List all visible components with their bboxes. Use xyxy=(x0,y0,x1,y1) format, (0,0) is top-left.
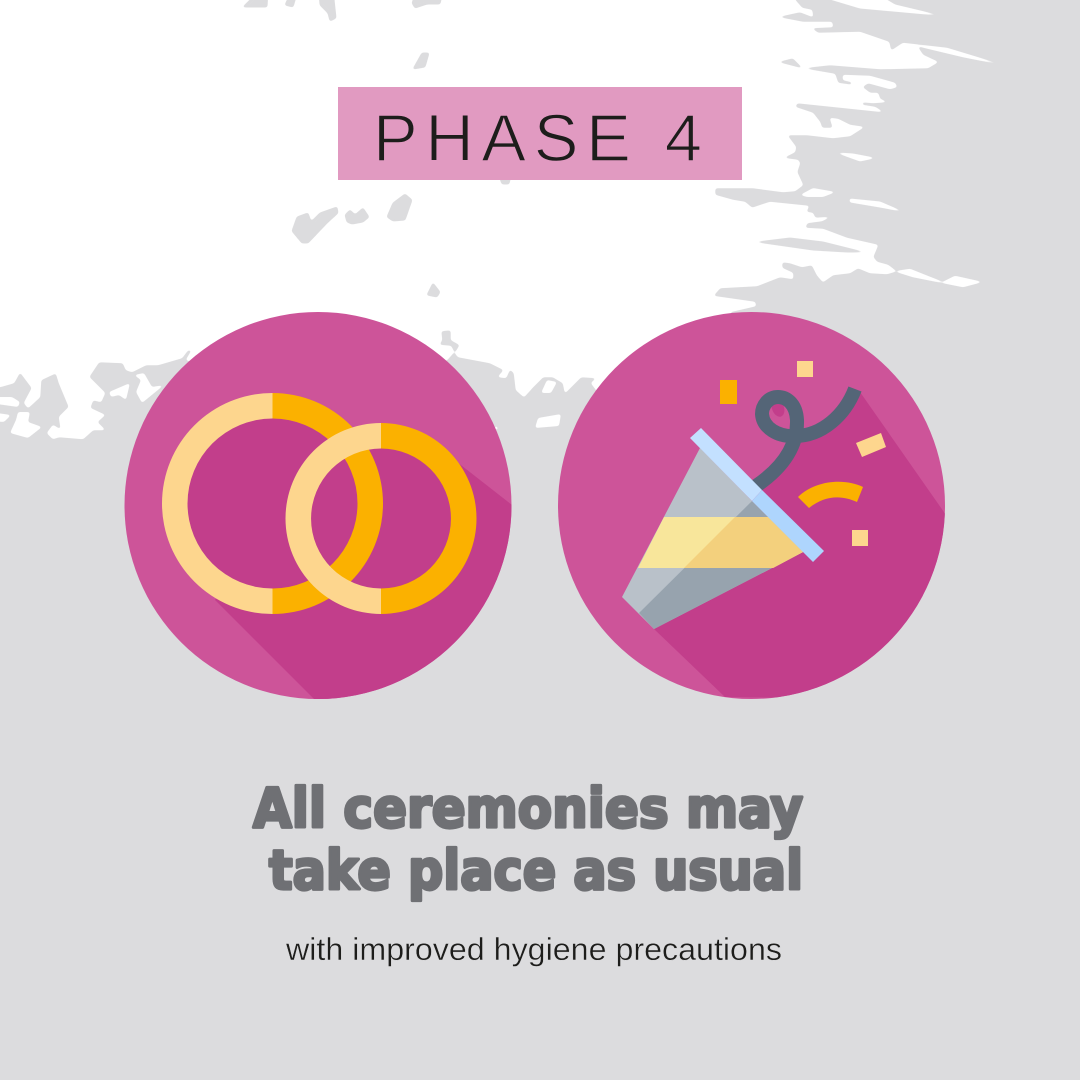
heading: take place as usual xyxy=(269,839,803,902)
ribbon streamer xyxy=(756,389,855,486)
popper cone xyxy=(622,428,824,629)
subheading: with improved hygiene precautions xyxy=(285,931,782,967)
icon: wedding rings circle xyxy=(124,312,512,700)
icon: party popper circle xyxy=(558,312,946,700)
heading: All ceremonies may xyxy=(253,777,803,840)
ring two xyxy=(286,423,476,614)
heading xyxy=(253,777,803,902)
confetti xyxy=(720,361,886,546)
title banner: PHASE 4: PHASE 4 xyxy=(373,101,702,176)
title banner: PHASE 4 xyxy=(338,87,742,180)
ring one xyxy=(162,393,383,614)
